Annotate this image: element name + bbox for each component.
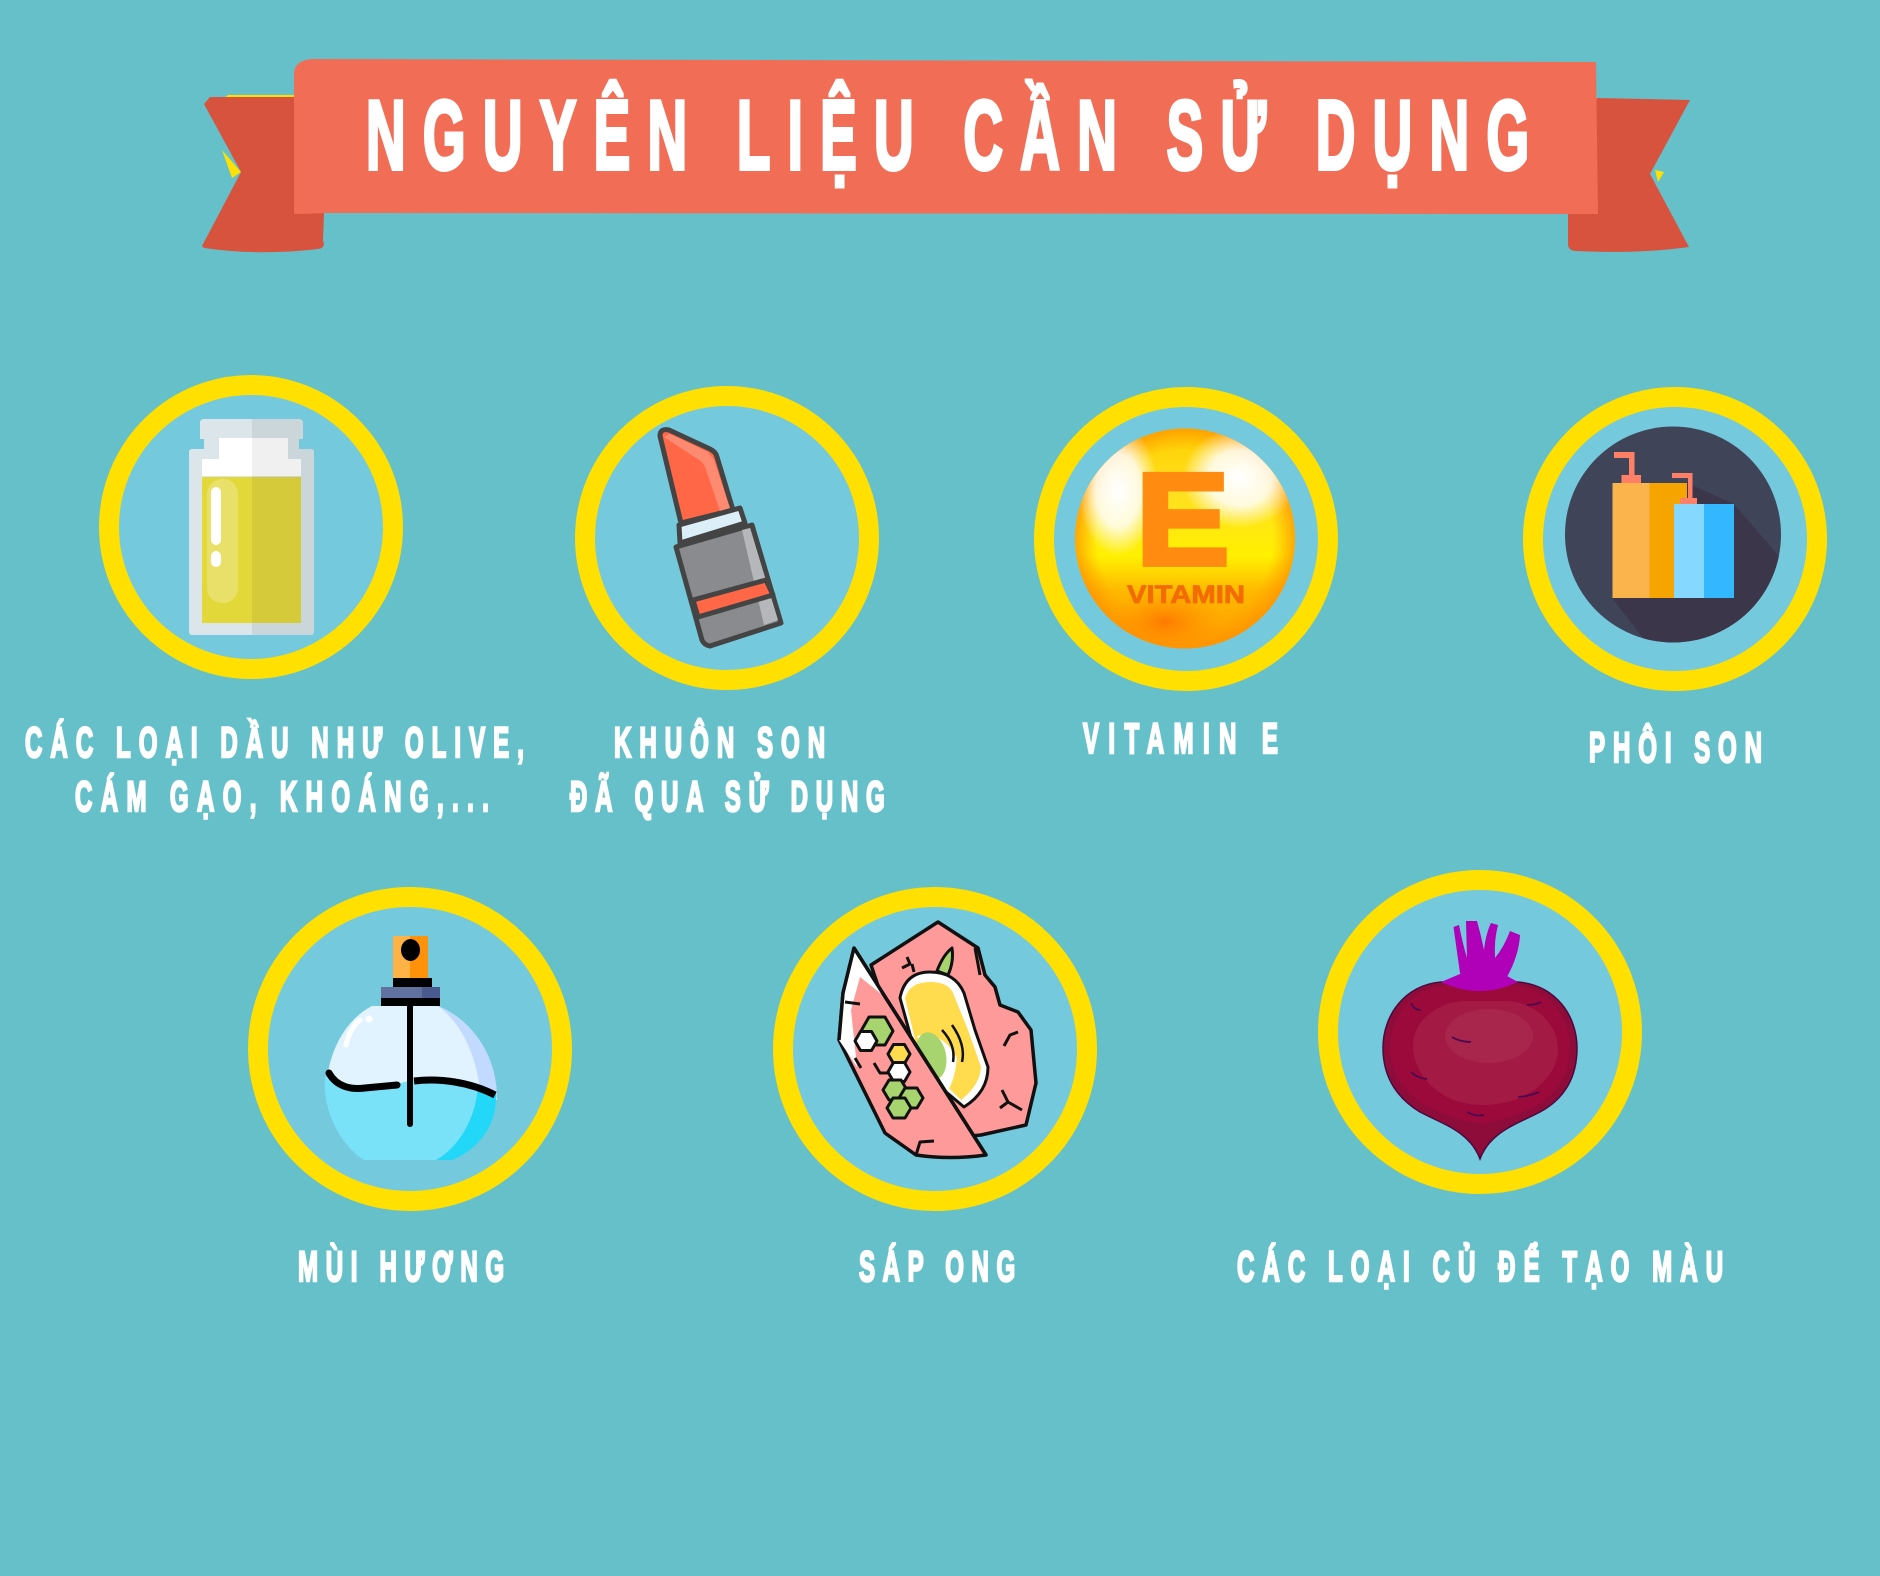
label: fragrance: MÙI HƯƠNG: [298, 1242, 504, 1291]
label: lipstick base: PHÔI SON: [1589, 723, 1762, 772]
icon: vitamin E capsule: E: [1136, 446, 1229, 593]
label: oil: [25, 718, 524, 821]
icon: beet: [1383, 921, 1577, 1159]
circle frame: lipstick: [585, 396, 869, 680]
ribbon main band: [294, 59, 1598, 214]
circle frame: base: [1533, 397, 1817, 681]
item: oil: [25, 385, 524, 821]
title banner: [202, 59, 1690, 252]
icon: lipstick: [660, 430, 781, 646]
icon: oil bottle: [189, 419, 314, 635]
label: vitamin E: VITAMIN E: [1083, 715, 1278, 763]
label: lipstick mold: KHUÔN SON: [614, 718, 825, 767]
circle frame: beeswax: [783, 897, 1087, 1201]
icon: vitamin E capsule: VITAMIN: [1127, 581, 1245, 609]
icon: beeswax avocado: [839, 922, 1036, 1158]
icon: perfume bottle: [325, 936, 497, 1160]
label: lipstick mold: ĐÃ QUA SỬ DỤNG: [570, 772, 885, 821]
circle frame: vitamin E: [1044, 397, 1328, 681]
item: lipstick mold: [570, 396, 885, 821]
title: NGUYÊN LIỆU CẦN SỬ DỤNG: [366, 80, 1529, 190]
label: oil: CÁC LOẠI DẦU NHƯ OLIVE,: [25, 718, 524, 767]
honeycomb hexagons: [855, 1017, 923, 1118]
icon: vitamin E capsule: [1075, 424, 1298, 656]
item: root vegetables: [1237, 880, 1723, 1291]
label: oil: CÁM GẠO, KHOÁNG,...: [75, 772, 489, 821]
icon: base bottles: [1565, 426, 1781, 642]
circle frame: beet: [1328, 880, 1632, 1184]
circle frame: fragrance: [258, 897, 562, 1201]
item: fragrance: [258, 897, 562, 1291]
item: vitamin E: [1044, 397, 1328, 763]
ribbon left tail: [202, 95, 324, 252]
ribbon right tail: [1568, 98, 1690, 252]
label: beeswax: SÁP ONG: [859, 1242, 1015, 1291]
item: beeswax: [783, 897, 1087, 1291]
label: root vegetables: CÁC LOẠI CỦ ĐỂ TẠO MÀU: [1237, 1242, 1723, 1291]
circle frame: oil: [109, 385, 393, 669]
item: lipstick base: [1533, 397, 1817, 772]
label: lipstick mold: [570, 718, 885, 821]
